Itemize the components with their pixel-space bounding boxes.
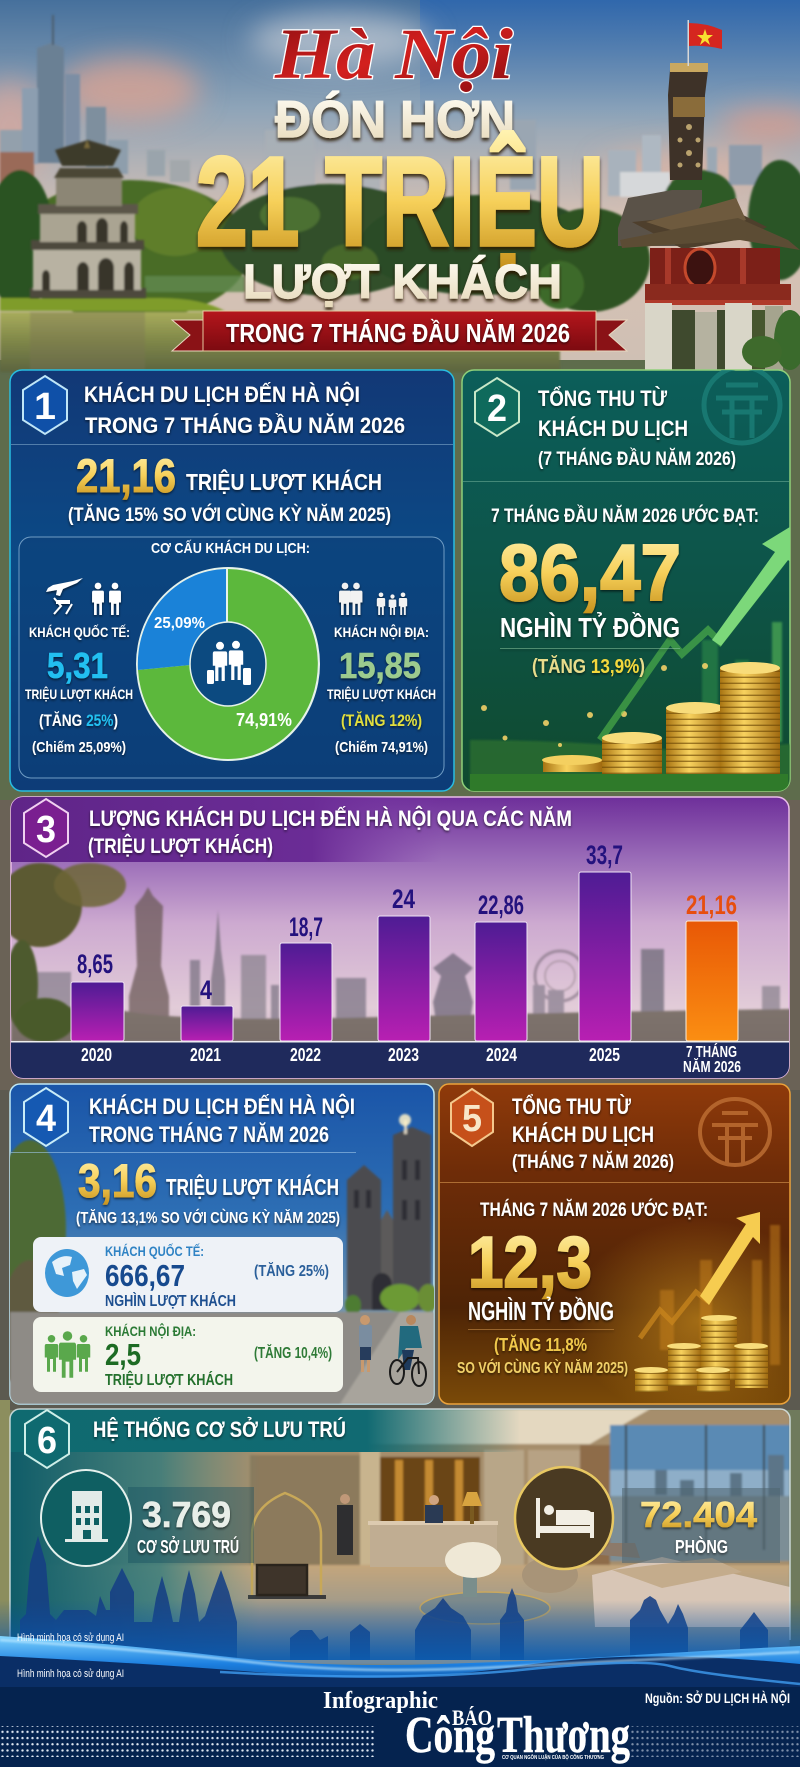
July revenue figure xyxy=(457,1199,708,1377)
stat: accommodation establishments: CƠ SỞ LƯU TRÚ xyxy=(137,1536,239,1557)
panel 4 heading xyxy=(89,1094,355,1147)
column: international visitors: (Chiếm 25,09%) xyxy=(32,739,126,756)
badge 2 xyxy=(475,378,519,436)
donut chart xyxy=(136,567,320,761)
panel 5 heading xyxy=(512,1094,674,1173)
total visitors: TRIỆU LƯỢT KHÁCH xyxy=(186,468,382,495)
bar 2022: 2022 xyxy=(290,1045,321,1065)
bar 2020 xyxy=(71,949,124,1065)
logo: Infographic Báo Công Thương: Infographic xyxy=(323,1688,438,1714)
card: domestic visitors: TRIỆU LƯỢT KHÁCH xyxy=(105,1370,233,1389)
donut chart: 25,09% xyxy=(154,615,205,632)
wave divider xyxy=(0,1600,800,1706)
bar 2025: 2025 xyxy=(589,1045,620,1065)
badge 3: 3 xyxy=(36,809,56,851)
AI notes xyxy=(17,1632,124,1680)
ribbon: date xyxy=(172,311,627,351)
people on the street xyxy=(359,1315,426,1386)
tree xyxy=(0,863,126,1042)
card: domestic visitors: (TĂNG 10,4%) xyxy=(254,1343,332,1362)
panel 1 heading: KHÁCH DU LỊCH ĐẾN HÀ NỘI xyxy=(84,382,360,407)
card: domestic visitors xyxy=(33,1317,343,1392)
column: international visitors xyxy=(25,578,133,756)
trees xyxy=(10,180,250,320)
title line: 21 TRIỆU: 21 TRIỆU xyxy=(196,131,604,272)
icon: travellers xyxy=(207,641,251,685)
stat: rooms xyxy=(515,1467,757,1569)
logo: Infographic Báo Công Thương: CƠ QUAN NGÔN LUẬN CỦA BỘ CÔNG THƯƠNG xyxy=(502,1753,604,1761)
panel 1: visitors xyxy=(10,370,454,791)
panel 3: visitors by year bar chart xyxy=(0,797,791,1078)
revenue figure: 86,47 xyxy=(499,528,681,617)
logo: Infographic Báo Công Thương: BÁO xyxy=(452,1705,492,1730)
bar 2021 xyxy=(181,975,233,1065)
bar 7 months 2026 xyxy=(683,890,741,1076)
column: domestic visitors: TRIỆU LƯỢT KHÁCH xyxy=(327,685,436,702)
bar 2025 xyxy=(579,840,631,1065)
bar 2022 xyxy=(280,912,332,1065)
badge 6: 6 xyxy=(37,1420,57,1462)
July revenue figure: 12,3 xyxy=(468,1223,592,1303)
hotel lobby scene xyxy=(10,1409,790,1665)
panel 3 heading: LƯỢNG KHÁCH DU LỊCH ĐẾN HÀ NỘI QUA CÁC NĂM xyxy=(89,806,572,831)
logo: Infographic Báo Công Thương: Công xyxy=(405,1707,495,1764)
panel 6 heading: HỆ THỐNG CƠ SỞ LƯU TRÚ xyxy=(93,1416,346,1442)
badge 1: 1 xyxy=(34,386,56,428)
structure box xyxy=(19,537,444,778)
panel 4: July visitors xyxy=(0,1084,438,1404)
column: international visitors: 5,31 xyxy=(47,645,108,686)
right towers xyxy=(608,150,636,196)
left teal overlay xyxy=(10,1452,252,1638)
lake xyxy=(0,312,560,372)
arrow xyxy=(600,522,798,740)
July total: (TĂNG 13,1% SO VỚI CÙNG KỲ NĂM 2025) xyxy=(76,1208,340,1227)
reception desk and staff xyxy=(337,1492,498,1567)
card: international visitors: KHÁCH QUỐC TẾ: xyxy=(105,1242,204,1259)
bar 7 months 2026: 7 THÁNG xyxy=(686,1042,737,1061)
card: international visitors: (TĂNG 25%) xyxy=(254,1261,329,1280)
icon: plane and tourists xyxy=(46,578,121,615)
panel 4 heading: KHÁCH DU LỊCH ĐẾN HÀ NỘI xyxy=(89,1094,355,1119)
total visitors: 21,16 xyxy=(76,449,176,502)
donut chart: 74,91% xyxy=(236,710,292,730)
bar 2020: 8,65 xyxy=(77,949,113,979)
panel 6: accommodation xyxy=(10,1409,790,1665)
Temple of Literature pavilion xyxy=(620,198,800,370)
revenue figure xyxy=(491,505,759,678)
icon: Vietnamese flag xyxy=(688,20,722,66)
July total: TRIỆU LƯỢT KHÁCH xyxy=(166,1173,339,1200)
title line: ĐÓN HƠN: ĐÓN HƠN xyxy=(275,91,515,149)
panel 2: revenue xyxy=(462,367,798,791)
badge 6 xyxy=(25,1410,69,1468)
window xyxy=(608,1468,790,1498)
revenue figure: (TĂNG 13,9%) xyxy=(532,655,645,678)
total visitors: (TĂNG 15% SO VỚI CÙNG KỲ NĂM 2025) xyxy=(68,504,391,526)
skyline xyxy=(11,887,791,1042)
stat: rooms: PHÒNG xyxy=(675,1536,728,1557)
column: international visitors: KHÁCH QUỐC TẾ: xyxy=(29,623,130,640)
left towers xyxy=(37,43,64,163)
panel 5 heading: KHÁCH DU LỊCH xyxy=(512,1122,654,1147)
stat: accommodation establishments xyxy=(41,1470,239,1566)
logo: Infographic Báo Công Thương: Thương xyxy=(497,1707,630,1764)
total visitors xyxy=(68,449,391,526)
flower table xyxy=(420,1542,578,1624)
panel 1 heading: TRONG 7 THÁNG ĐẦU NĂM 2026 xyxy=(85,413,405,438)
panel 5: July revenue xyxy=(439,1084,800,1420)
stat: accommodation establishments: 3.769 xyxy=(142,1494,231,1535)
badge 4: 4 xyxy=(36,1098,56,1140)
panel 1 heading xyxy=(84,382,405,438)
bar 2023: 2023 xyxy=(388,1045,419,1065)
bar 2024: 2024 xyxy=(486,1045,517,1065)
AI notes: Hình minh họa có sử dụng AI xyxy=(17,1668,124,1680)
July revenue figure: SO VỚI CÙNG KỲ NĂM 2025) xyxy=(457,1358,628,1377)
bar 2024: 22,86 xyxy=(478,890,524,920)
bar 2024 xyxy=(475,890,527,1065)
column: domestic visitors: (Chiếm 74,91%) xyxy=(335,739,428,756)
title xyxy=(172,14,627,351)
icon: hotel building xyxy=(65,1491,108,1542)
panel 5 heading: TỔNG THU TỪ xyxy=(512,1094,632,1119)
stat: rooms: 72.404 xyxy=(640,1494,757,1535)
badge 5: 5 xyxy=(462,1098,482,1140)
emblem xyxy=(704,367,780,443)
emblem xyxy=(700,1099,770,1165)
structure box: CƠ CẤU KHÁCH DU LỊCH: xyxy=(151,540,310,557)
card: international visitors: NGHÌN LƯỢT KHÁCH xyxy=(105,1291,236,1310)
ribbon: date: TRONG 7 THÁNG ĐẦU NĂM 2026 xyxy=(226,318,570,348)
coin stacks xyxy=(470,662,788,791)
bar 7 months 2026: NĂM 2026 xyxy=(683,1057,741,1076)
bar 7 months 2026: 21,16 xyxy=(686,890,737,920)
skyline silhouette xyxy=(20,1536,768,1662)
panel 2 heading: (7 THÁNG ĐẦU NĂM 2026) xyxy=(538,448,736,470)
card: domestic visitors: 2,5 xyxy=(105,1337,141,1372)
panel 4 heading: TRONG THÁNG 7 NĂM 2026 xyxy=(89,1122,329,1147)
column: international visitors: (TĂNG 25%) xyxy=(39,711,118,730)
bar 2023: 24 xyxy=(392,884,415,914)
dotted strips xyxy=(0,1726,800,1757)
footer xyxy=(0,1632,800,1767)
bar 2022: 18,7 xyxy=(289,912,323,942)
bar 2020: 2020 xyxy=(81,1045,112,1065)
column: international visitors: TRIỆU LƯỢT KHÁCH xyxy=(25,685,133,702)
header scene: Hanoi skyline and lake xyxy=(0,0,800,372)
icon: family xyxy=(339,583,407,615)
July revenue figure: (TĂNG 11,8% xyxy=(494,1334,587,1355)
July total: 3,16 xyxy=(78,1154,157,1207)
title line: LƯỢT KHÁCH: LƯỢT KHÁCH xyxy=(243,255,562,309)
luggage cart xyxy=(248,1493,326,1599)
July revenue figure: NGHÌN TỶ ĐỒNG xyxy=(468,1296,614,1326)
badge 1 xyxy=(23,376,67,434)
card: international visitors xyxy=(33,1237,343,1312)
column: domestic visitors: (TĂNG 12%) xyxy=(341,711,422,730)
column: domestic visitors: KHÁCH NỘI ĐỊA: xyxy=(334,623,429,640)
revenue figure: NGHÌN TỶ ĐỒNG xyxy=(500,611,680,643)
AI notes: Hình minh họa có sử dụng AI xyxy=(17,1632,124,1644)
street scene with cathedral xyxy=(0,1114,438,1404)
bar 2021: 2021 xyxy=(190,1045,221,1065)
panel 5 heading: (THÁNG 7 NĂM 2026) xyxy=(512,1151,674,1173)
floor xyxy=(96,1564,790,1665)
bed xyxy=(592,1543,790,1627)
icon: globe xyxy=(45,1249,89,1297)
Turtle Tower xyxy=(30,140,146,298)
badge 3 xyxy=(24,799,68,857)
badge 4 xyxy=(24,1088,68,1146)
panel 3 heading: (TRIỆU LƯỢT KHÁCH) xyxy=(88,834,273,858)
panel 2 heading xyxy=(538,386,736,470)
arrow xyxy=(640,1212,760,1338)
centre towers xyxy=(265,130,315,220)
bar 2025: 33,7 xyxy=(586,840,623,870)
card: domestic visitors: KHÁCH NỘI ĐỊA: xyxy=(105,1322,196,1339)
panel 3 heading xyxy=(88,806,572,858)
title script: Hà Nội: Hà Nội xyxy=(274,14,513,94)
logo: Infographic Báo Công Thương xyxy=(323,1688,630,1764)
column: domestic visitors: 15,85 xyxy=(339,645,421,686)
column: domestic visitors xyxy=(327,583,436,756)
Flag Tower xyxy=(618,63,708,246)
icon: people group xyxy=(45,1331,90,1378)
bar 2021: 4 xyxy=(200,975,212,1005)
panel 2 heading: TỔNG THU TỪ xyxy=(538,386,668,411)
coin stacks xyxy=(634,1315,768,1392)
card: international visitors: 666,67 xyxy=(105,1258,185,1293)
badge 2: 2 xyxy=(487,388,507,430)
bar 2023 xyxy=(378,884,430,1065)
heading band xyxy=(10,1409,520,1452)
badge 5 xyxy=(451,1089,493,1146)
icon: bed xyxy=(536,1498,594,1538)
July total xyxy=(76,1154,340,1227)
July revenue figure: THÁNG 7 NĂM 2026 ƯỚC ĐẠT: xyxy=(480,1199,708,1221)
panel 2 heading: KHÁCH DU LỊCH xyxy=(538,416,688,441)
